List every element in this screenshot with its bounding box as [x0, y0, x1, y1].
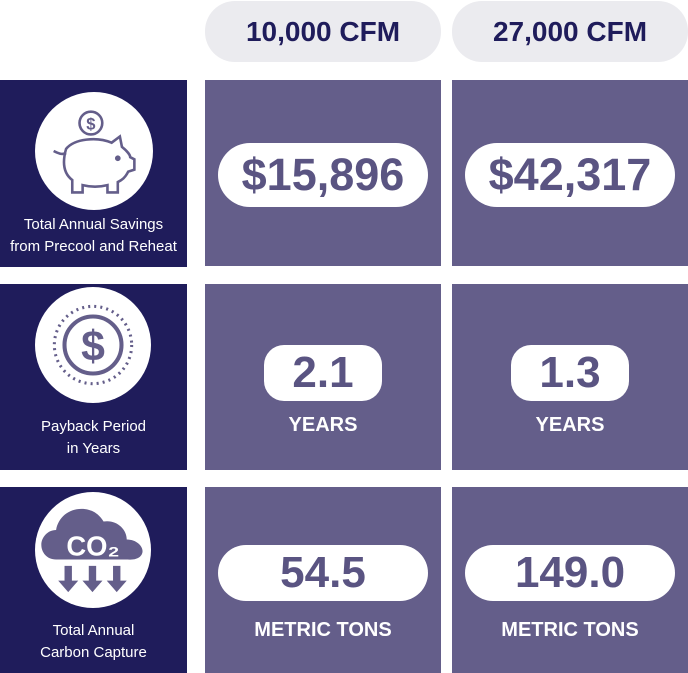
cell: 27k savings — [452, 80, 688, 266]
text: payback label: in Years — [67, 440, 120, 457]
cell: 10k payback: YEARS — [289, 414, 357, 436]
cell: 10k payback — [205, 284, 441, 470]
text: payback label: Payback Period — [41, 418, 146, 435]
icon: dollar clock — [35, 287, 151, 403]
cell: 10k payback: 2.1 — [292, 348, 354, 397]
icon: piggy bank — [35, 92, 153, 210]
cell: 27k payback: 1.3 — [539, 348, 601, 397]
panel: savings label — [0, 80, 187, 267]
header: 27,000 CFM — [452, 1, 688, 62]
text: carbon label — [40, 622, 147, 661]
header: 27,000 CFM: 27,000 CFM — [493, 16, 647, 46]
cell: 27k carbon: METRIC TONS — [501, 619, 639, 641]
icon: dollar clock: $ — [81, 322, 105, 370]
text: savings label: Total Annual Savings — [24, 216, 163, 233]
cell: 27k carbon: 149.0 — [515, 548, 625, 597]
panel: payback label — [0, 284, 187, 470]
text: savings label: from Precool and Reheat — [10, 238, 177, 255]
icon: CO2 cloud — [35, 492, 151, 608]
cell: 10k savings — [205, 80, 441, 266]
cell: 10k savings: $15,896 — [242, 149, 404, 200]
cell: 27k payback: YEARS — [536, 414, 604, 436]
cell: 10k carbon: METRIC TONS — [254, 619, 392, 641]
cell: 27k carbon — [452, 487, 688, 673]
cell: 10k carbon — [205, 487, 441, 673]
text: carbon label: Total Annual — [53, 622, 134, 639]
header: 10,000 CFM — [205, 1, 441, 62]
panel: carbon label — [0, 487, 187, 673]
header: 10,000 CFM: 10,000 CFM — [246, 16, 400, 46]
icon: piggy bank: $ — [86, 114, 95, 133]
cell: 27k payback — [452, 284, 688, 470]
text: carbon label: Carbon Capture — [40, 644, 147, 661]
cell: 10k carbon: 54.5 — [280, 548, 366, 597]
icon: CO2 cloud: CO₂ — [66, 530, 120, 561]
text: payback label — [41, 418, 146, 457]
text: savings label — [10, 216, 177, 255]
cell: 27k savings: $42,317 — [489, 149, 651, 200]
